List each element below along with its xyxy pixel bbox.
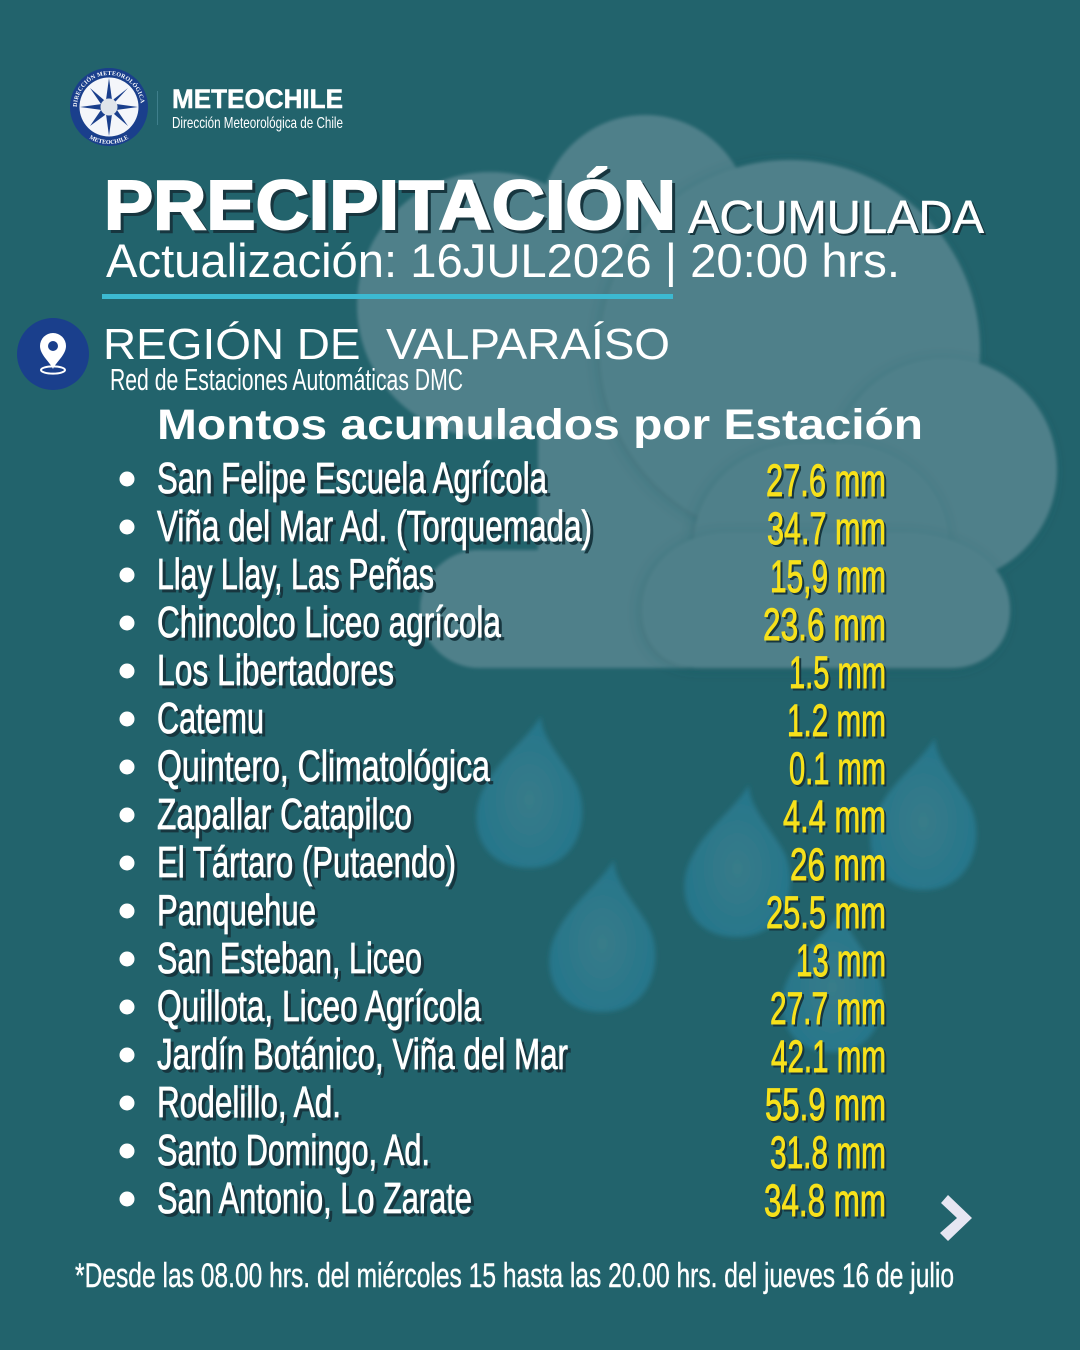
- title underline: [102, 294, 673, 299]
- list bullets: [120, 472, 134, 1206]
- logo: Dirección Meteorológica emblem: METEOCHILE: [89, 135, 128, 144]
- station names list: Jardín Botánico, Viña del Mar: [157, 1030, 568, 1079]
- station names list: Catemu: [157, 694, 264, 743]
- brand subtitle: Dirección Meteorológica de Chile: [172, 115, 343, 132]
- rainfall values list: 26 mm: [790, 839, 886, 890]
- rainfall values list: 13 mm: [796, 935, 886, 986]
- station names list: El Tártaro (Putaendo): [157, 838, 456, 887]
- station names list: Quintero, Climatológica: [157, 742, 490, 791]
- network subtitle: Red de Estaciones Automáticas DMC: [110, 362, 463, 397]
- station names list: Los Libertadores: [157, 646, 394, 695]
- station names list: Viña del Mar Ad. (Torquemada): [157, 502, 592, 551]
- icon: location pin: [17, 318, 89, 390]
- logo: Dirección Meteorológica emblem: [70, 68, 148, 146]
- region heading: REGIÓN DE VALPARAÍSO: [103, 320, 670, 369]
- station names list: Zapallar Catapilco: [157, 790, 412, 839]
- title: PRECIPITACIÓN: [104, 166, 676, 244]
- rainfall values list: 34.8 mm: [764, 1175, 886, 1226]
- section heading: Montos acumulados por Estación: [157, 401, 923, 449]
- brand name: METEOCHILE: [172, 84, 343, 114]
- station names list: San Felipe Escuela Agrícola: [157, 454, 547, 503]
- rainfall values list: 23.6 mm: [763, 599, 886, 650]
- rainfall values list: 31.8 mm: [770, 1127, 886, 1178]
- title suffix: ACUMULADA: [688, 191, 984, 243]
- rainfall values list: 27.6 mm: [766, 455, 886, 506]
- rainfall values list: 42.1 mm: [771, 1031, 886, 1082]
- station names list: San Esteban, Liceo: [157, 934, 422, 983]
- rainfall values list: 25.5 mm: [766, 887, 886, 938]
- station names list: [157, 454, 592, 1223]
- rainfall values list: 34.7 mm: [767, 503, 886, 554]
- rainfall values list: 1.2 mm: [787, 695, 886, 746]
- station names list: Quillota, Liceo Agrícola: [157, 982, 481, 1031]
- station names list: Llay Llay, Las Peñas: [157, 550, 434, 599]
- rain drops: [476, 716, 976, 1052]
- brand divider: [157, 91, 158, 125]
- rainfall values list: 0.1 mm: [789, 743, 886, 794]
- update timestamp: Actualización: 16JUL2026 | 20:00 hrs.: [106, 234, 900, 287]
- station names list: Rodelillo, Ad.: [157, 1078, 341, 1127]
- rainfall values list: 1.5 mm: [789, 647, 886, 698]
- station names list: Santo Domingo, Ad.: [157, 1126, 430, 1175]
- rainfall values list: 15,9 mm: [770, 551, 886, 602]
- station names list: Panquehue: [157, 886, 316, 935]
- rainfall values list: 55.9 mm: [765, 1079, 886, 1130]
- station names list: San Antonio, Lo Zarate: [157, 1174, 472, 1223]
- rainfall values list: 4.4 mm: [783, 791, 886, 842]
- arrow: next: [940, 1195, 972, 1241]
- logo: Dirección Meteorológica emblem: DIRECCIÓN METEOROLÓGICA: [73, 71, 144, 107]
- station names list: Chincolco Liceo agrícola: [157, 598, 501, 647]
- rainfall values list: 27.7 mm: [770, 983, 886, 1034]
- rainfall values list: [763, 455, 886, 1226]
- cloud illustration: [357, 115, 1057, 668]
